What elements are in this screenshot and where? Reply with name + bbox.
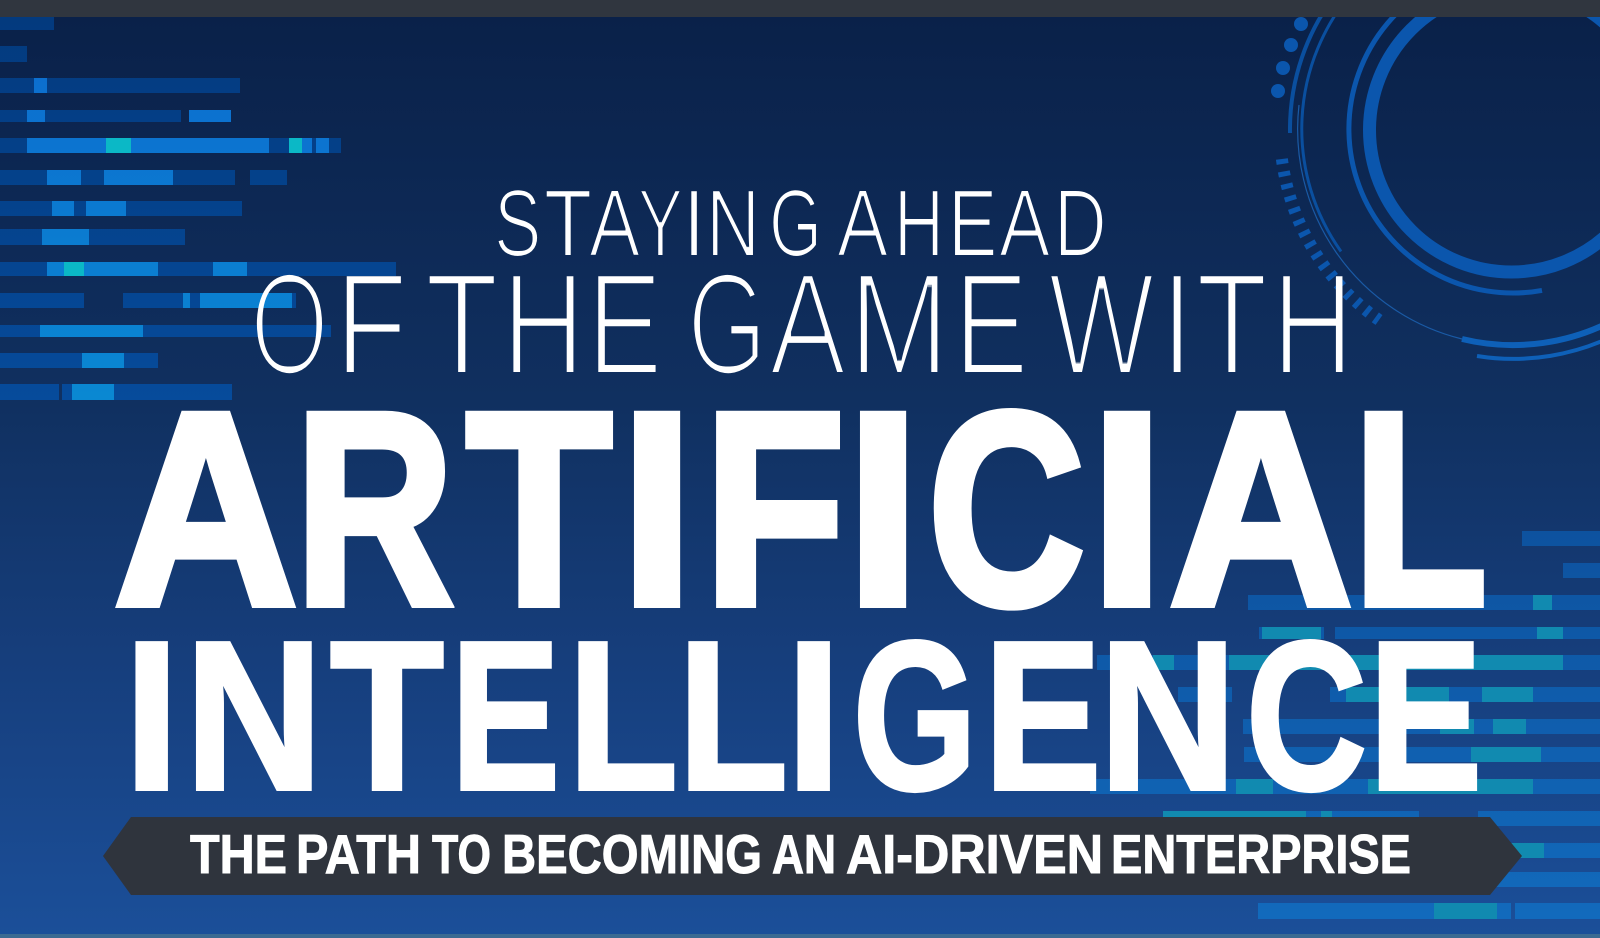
- title line: INTELLIGENCE: N: [185, 597, 323, 834]
- title line: INTELLIGENCE: I: [786, 597, 841, 834]
- title line: ARTIFICIAL: I: [846, 356, 920, 663]
- title line: STAYING AHEAD: T: [544, 170, 592, 277]
- subtitle: the path to becoming an AI-driven enterprise: AI-DRIVEN: [846, 823, 1103, 885]
- title line: OF THE GAME WITH: A: [769, 243, 846, 405]
- title line: ARTIFICIAL: F: [704, 356, 845, 663]
- title line: OF THE GAME WITH: T: [1196, 243, 1268, 405]
- top dark strip: [0, 0, 1600, 17]
- title line: STAYING AHEAD: [494, 170, 1107, 277]
- title line: OF THE GAME WITH: T: [425, 243, 499, 405]
- title line: OF THE GAME WITH: H: [1272, 243, 1354, 405]
- title line: OF THE GAME WITH: O: [250, 243, 329, 405]
- bottom edge strip: [0, 934, 1600, 938]
- subtitle: the path to becoming an AI-driven enterprise: ENTERPRISE: [1111, 823, 1411, 885]
- title line: STAYING AHEAD: A: [589, 170, 640, 277]
- data bars: bottom right: [1090, 531, 1600, 919]
- title line: INTELLIGENCE: I: [124, 597, 179, 834]
- title line: OF THE GAME WITH: H: [502, 243, 585, 405]
- title line: STAYING AHEAD: A: [999, 170, 1050, 277]
- title line: INTELLIGENCE: C: [1246, 597, 1367, 834]
- title line: INTELLIGENCE: L: [678, 597, 788, 834]
- title line: ARTIFICIAL: I: [1090, 356, 1164, 663]
- title line: INTELLIGENCE: E: [984, 597, 1101, 834]
- title line: STAYING AHEAD: Y: [638, 170, 683, 277]
- title line: INTELLIGENCE: E: [451, 597, 560, 834]
- title line: STAYING AHEAD: E: [948, 170, 997, 277]
- title line: ARTIFICIAL: C: [928, 356, 1085, 663]
- title line: OF THE GAME WITH: F: [335, 243, 408, 405]
- title line: INTELLIGENCE: G: [853, 597, 977, 834]
- title line: OF THE GAME WITH: M: [849, 243, 949, 405]
- title line: STAYING AHEAD: D: [1054, 170, 1107, 277]
- title line: ARTIFICIAL: [114, 356, 1487, 663]
- title line: OF THE GAME WITH: E: [954, 243, 1028, 405]
- title line: ARTIFICIAL: R: [295, 356, 454, 663]
- subtitle: the path to becoming an AI-driven enterprise: PATH: [296, 823, 421, 885]
- subtitle: the path to becoming an AI-driven enterprise: AN: [772, 823, 836, 885]
- title line: ARTIFICIAL: I: [620, 356, 694, 663]
- title line: OF THE GAME WITH: E: [587, 243, 662, 405]
- title line: OF THE GAME WITH: [250, 243, 1354, 405]
- title line: INTELLIGENCE: [124, 597, 1482, 834]
- title line: INTELLIGENCE: N: [1099, 597, 1237, 834]
- subtitle: the path to becoming an AI-driven enterprise: TO: [432, 823, 491, 885]
- title line: ARTIFICIAL: A: [1169, 356, 1353, 663]
- title line: STAYING AHEAD: A: [837, 170, 888, 277]
- title line: ARTIFICIAL: T: [466, 356, 612, 663]
- title line: STAYING AHEAD: H: [894, 170, 944, 277]
- subtitle: the path to becoming an AI-driven enterprise: BECOMING: [502, 823, 762, 885]
- title line: OF THE GAME WITH: G: [687, 243, 767, 405]
- subtitle banner shape: [103, 817, 1522, 895]
- title line: ARTIFICIAL: A: [114, 356, 298, 663]
- title line: STAYING AHEAD: S: [494, 170, 541, 277]
- title line: INTELLIGENCE: L: [568, 597, 678, 834]
- title line: STAYING AHEAD: I: [683, 170, 705, 277]
- title line: INTELLIGENCE: T: [330, 597, 444, 834]
- concentric tech rings: top right: [1271, 0, 1600, 359]
- title line: ARTIFICIAL: L: [1353, 356, 1487, 663]
- title line: OF THE GAME WITH: I: [1161, 243, 1193, 405]
- title line: STAYING AHEAD: G: [769, 170, 822, 277]
- title line: STAYING AHEAD: N: [706, 170, 760, 277]
- subtitle: the path to becoming an AI-driven enterprise: THE: [190, 823, 287, 885]
- title line: INTELLIGENCE: E: [1369, 597, 1482, 834]
- data bars: top left: [0, 17, 396, 400]
- title line: OF THE GAME WITH: W: [1048, 243, 1155, 405]
